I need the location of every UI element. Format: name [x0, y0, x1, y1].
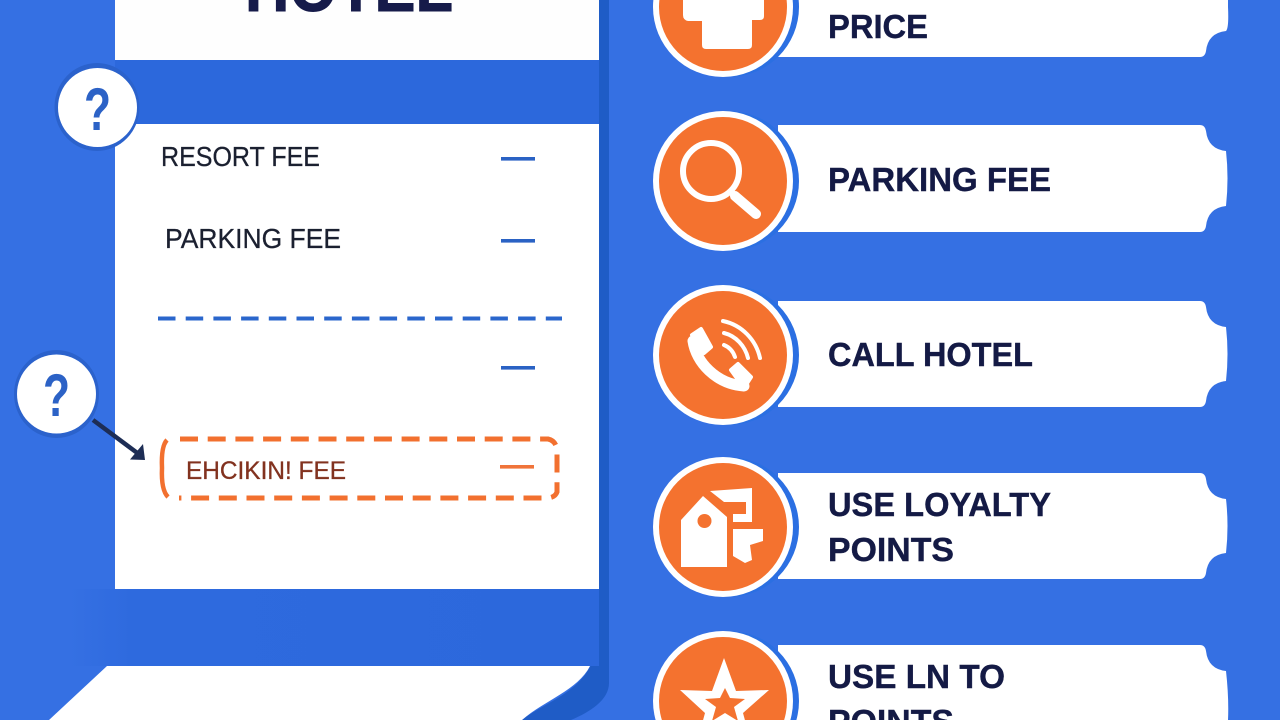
badge [653, 0, 799, 77]
blank row dash [501, 366, 535, 370]
icon: tags [681, 488, 763, 567]
card [778, 473, 1228, 579]
row: parking fee: PARKING FEE [165, 223, 341, 254]
panel: hotel receipt [49, 0, 609, 720]
row: resort fee [161, 141, 535, 172]
garbled fee label: EHCIKIN! FEE [186, 457, 346, 485]
text: PARKING FEE [828, 161, 1051, 198]
badge [653, 457, 799, 597]
step: use loyalty points [653, 457, 1228, 597]
question badge bottom [14, 350, 99, 438]
middle blue band [115, 60, 599, 124]
text: PRICE [828, 8, 928, 45]
bottom sheet [49, 666, 590, 720]
step: price [653, 0, 1228, 77]
orange dashed box [179, 439, 557, 498]
text line two: POINTS [828, 531, 954, 568]
step: use points [653, 631, 1228, 720]
text: CALL HOTEL [828, 336, 1033, 373]
receipt header sheet [115, 0, 599, 60]
icon: star [680, 658, 769, 720]
receipt edge and page curl [522, 0, 609, 720]
lower blue band [70, 589, 599, 666]
question badge top [54, 63, 140, 151]
orange bracket [162, 440, 168, 497]
card [778, 125, 1228, 232]
step: call hotel [653, 285, 1228, 425]
row: resort fee: RESORT FEE [161, 141, 320, 172]
arrow to hidden fee [93, 420, 145, 460]
question badge bottom: ? [43, 362, 70, 429]
card [778, 645, 1228, 720]
dashed divider [158, 316, 562, 320]
badge [653, 285, 799, 425]
row: parking fee [165, 223, 535, 254]
badge [653, 631, 799, 720]
receipt body sheet [115, 124, 599, 589]
question badge top: ? [84, 76, 111, 143]
icon: shirt [683, 0, 764, 49]
orange dash [500, 465, 534, 469]
text line one: USE LN TO [828, 658, 1005, 695]
badge [653, 111, 799, 251]
text line one: USE LOYALTY [828, 486, 1051, 523]
step: parking fee [653, 111, 1228, 251]
icon: phone with waves [692, 321, 760, 388]
icon: magnifier [683, 143, 756, 214]
card [778, 0, 1228, 57]
card [778, 301, 1228, 407]
highlighted hidden fee row [162, 439, 557, 498]
